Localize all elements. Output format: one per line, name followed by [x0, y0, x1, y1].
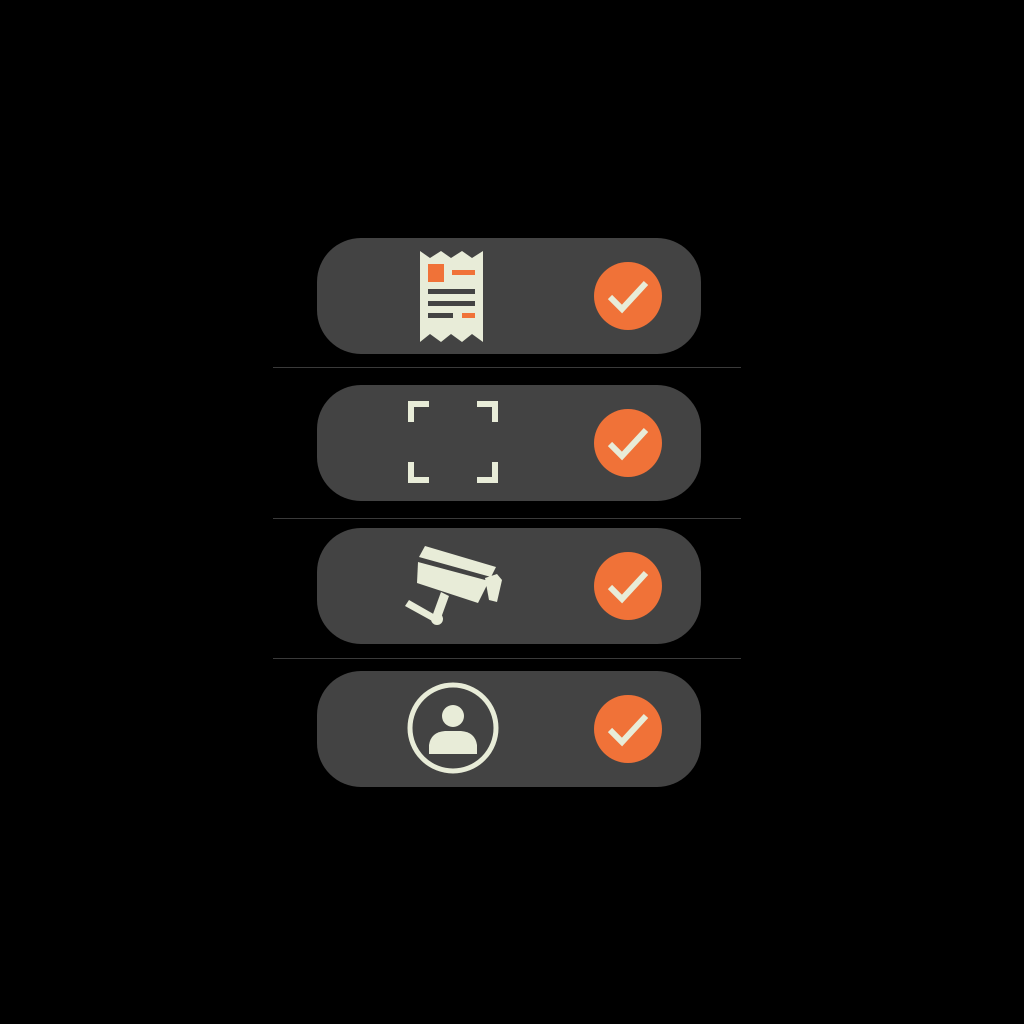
icon: user	[410, 685, 496, 771]
panel: scan frame	[317, 385, 701, 501]
panel: camera	[317, 528, 701, 644]
icon: check 3	[594, 552, 662, 620]
icon: receipt	[420, 251, 483, 342]
icon: check 1	[594, 262, 662, 330]
icon: security camera	[405, 546, 502, 625]
icon: check 4	[594, 695, 662, 763]
panel: receipt	[317, 238, 701, 354]
icon: check 2	[594, 409, 662, 477]
icon: scan frame	[411, 404, 495, 480]
panel: user	[317, 671, 701, 787]
